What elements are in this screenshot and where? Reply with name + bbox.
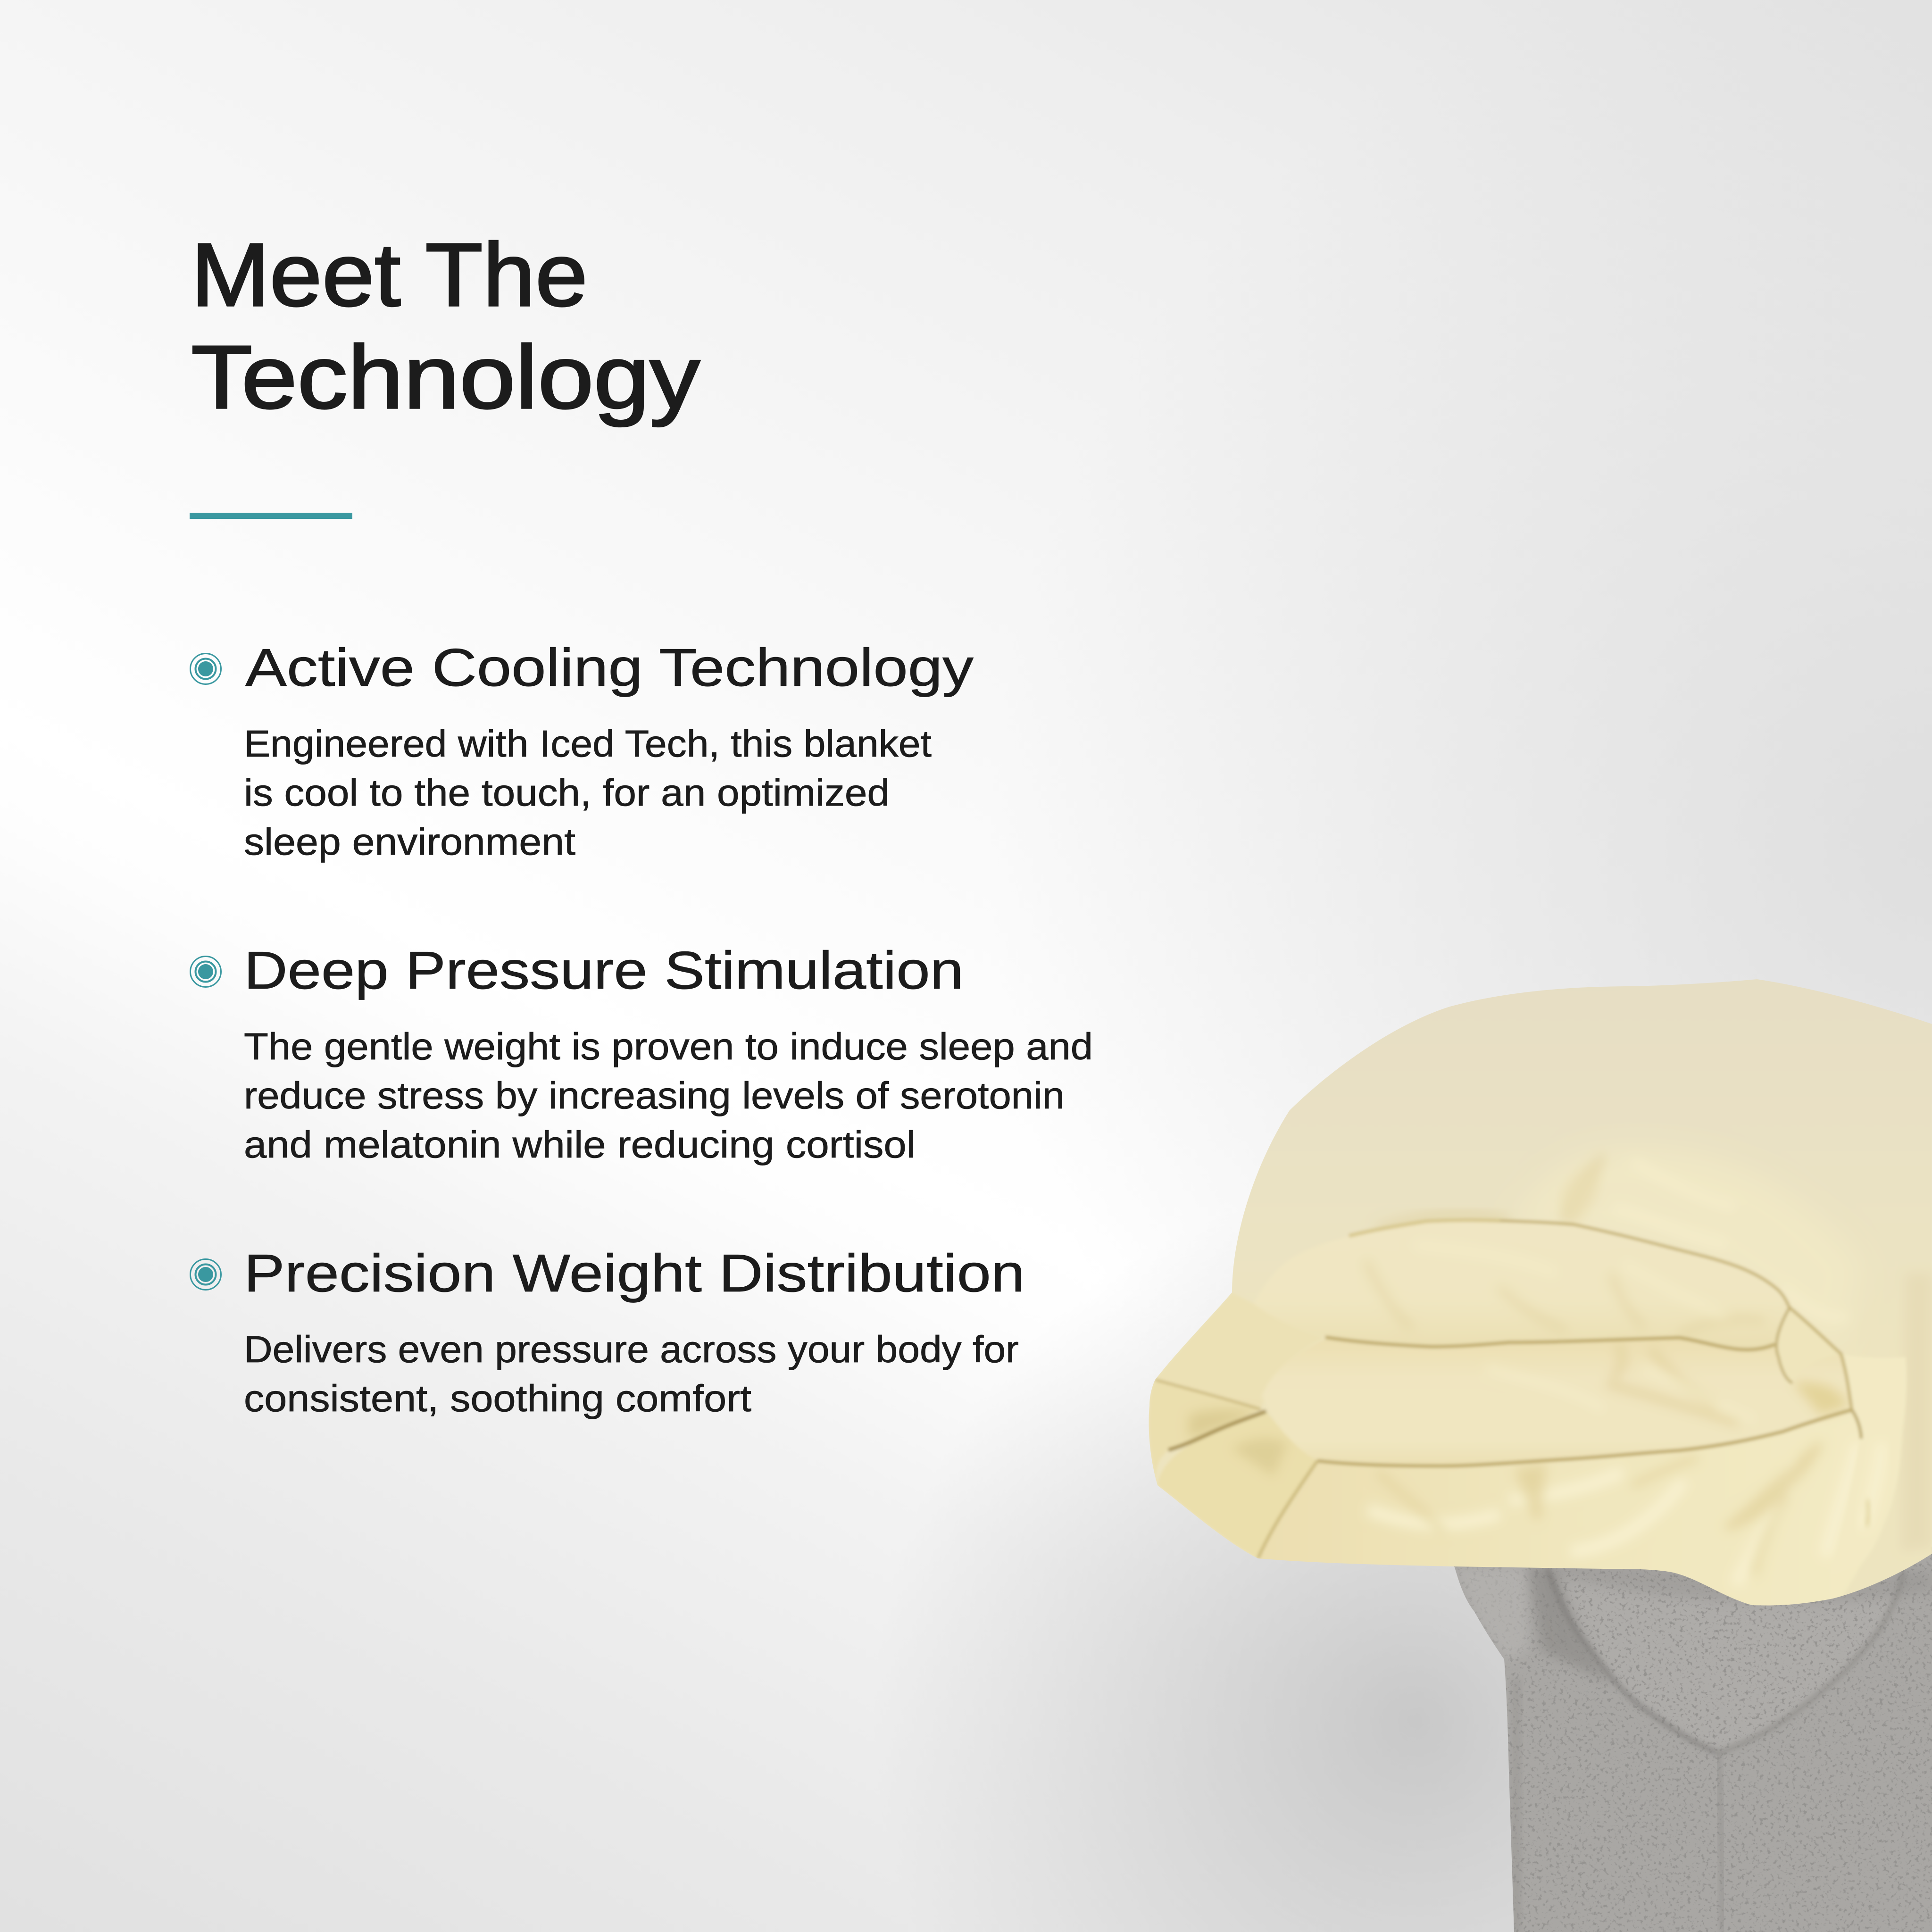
feature: active cooling [191, 638, 974, 863]
icon: target bullet [191, 1259, 221, 1290]
concrete stand [1443, 1547, 1932, 1932]
description: and melatonin while reducing cortisol [244, 1124, 916, 1166]
icon: target bullet [191, 957, 221, 987]
bottom fold [1245, 1410, 1882, 1613]
description: Engineered with Iced Tech, this blanket [244, 723, 932, 765]
upper roll [1254, 1221, 1790, 1349]
icon: target bullet [191, 654, 221, 684]
description: consistent, soothing comfort [244, 1377, 751, 1419]
title: Meet The [191, 225, 588, 325]
title: Technology [191, 327, 700, 427]
description: The gentle weight is proven to induce sleep and [244, 1025, 1093, 1067]
feature: precision weight [191, 1243, 1025, 1419]
left flap [1155, 1292, 1325, 1409]
description [244, 723, 932, 863]
title [191, 225, 700, 427]
blanket top mass shading [1509, 1149, 1863, 1354]
description: is cool to the touch, for an optimized [244, 772, 890, 814]
description: Delivers even pressure across your body for [244, 1328, 1019, 1370]
title accent rule [190, 513, 352, 519]
middle roll [1262, 1338, 1852, 1466]
fold crease lines [1325, 1337, 1775, 1350]
feature list [191, 638, 1093, 1419]
feature: deep pressure [191, 941, 1093, 1166]
blanket [1132, 967, 1932, 1618]
product photo: folded blanket on concrete stand [1132, 967, 1932, 1932]
heading: Precision Weight Distribution [244, 1243, 1025, 1303]
fold tuck [1776, 1307, 1841, 1383]
heading: Deep Pressure Stimulation [244, 941, 964, 1000]
heading: Active Cooling Technology [245, 638, 974, 697]
right wrap [1830, 1354, 1907, 1575]
description [244, 1025, 1093, 1166]
description: sleep environment [244, 821, 575, 863]
description [244, 1328, 1019, 1419]
description: reduce stress by increasing levels of serotonin [244, 1074, 1065, 1116]
